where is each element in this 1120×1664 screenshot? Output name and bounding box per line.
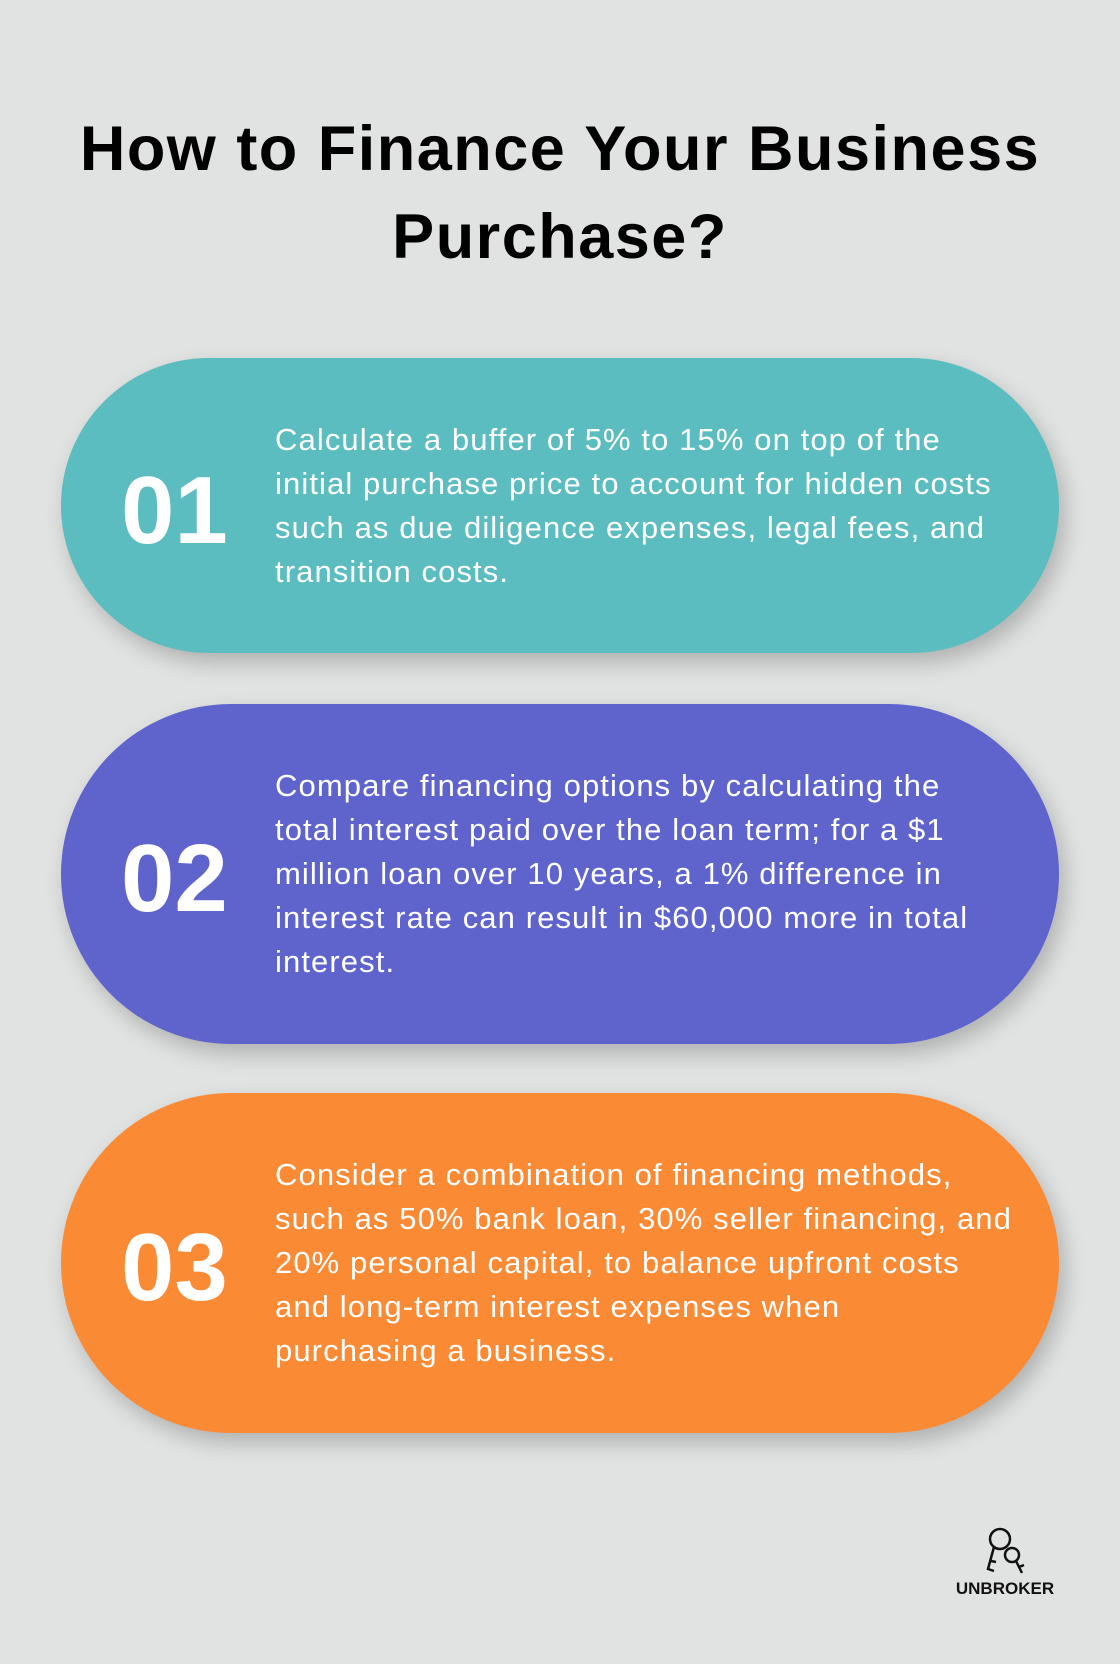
icon: keys — [986, 1528, 1024, 1574]
text 01: initial purchase price to account for hidden costs — [275, 466, 992, 501]
text 01: Calculate a buffer of 5% to 15% on top of the — [275, 422, 941, 457]
title: How to Finance Your Business — [80, 114, 1040, 184]
panel: step 02 — [61, 704, 1059, 1044]
text 03: Consider a combination of financing methods, — [275, 1157, 952, 1192]
text 02: Compare financing options by calculating the — [275, 768, 940, 803]
text 01: such as due diligence expenses, legal fees, and — [275, 510, 985, 545]
text 03: 20% personal capital, to balance upfront costs — [275, 1245, 960, 1280]
logo — [956, 1528, 1054, 1598]
text 03: and long-term interest expenses when — [275, 1289, 840, 1324]
text 02: interest. — [275, 944, 395, 979]
number 02: 02 — [121, 825, 228, 932]
text 03: purchasing a business. — [275, 1333, 616, 1368]
text 01: transition costs. — [275, 554, 509, 589]
panel: step 03 — [61, 1093, 1059, 1433]
text 02: interest rate can result in $60,000 more in total — [275, 900, 968, 935]
number 03: 03 — [121, 1214, 228, 1321]
title: Purchase? — [392, 202, 728, 272]
title — [80, 114, 1040, 272]
number 01: 01 — [121, 457, 228, 564]
text 03 — [275, 1157, 1012, 1368]
text 01 — [275, 422, 992, 589]
text 02: total interest paid over the loan term; for a $1 — [275, 812, 945, 847]
text 02: million loan over 10 years, a 1% difference in — [275, 856, 942, 891]
brand name: UNBROKER — [956, 1579, 1054, 1598]
text 02 — [275, 768, 968, 979]
text 03: such as 50% bank loan, 30% seller financing, and — [275, 1201, 1012, 1236]
panel: step 01 — [61, 358, 1059, 653]
